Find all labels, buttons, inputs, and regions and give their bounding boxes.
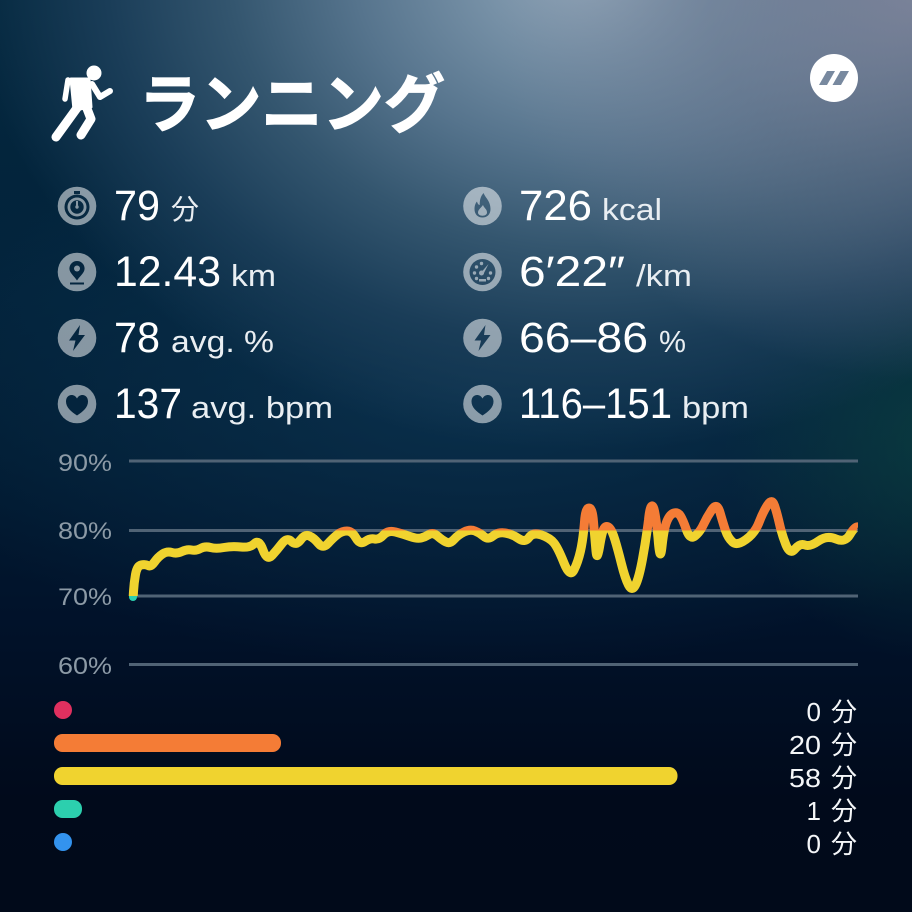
unit: km: km xyxy=(231,258,276,293)
label: yellow 58 min: 分 xyxy=(831,763,857,793)
stat: calories xyxy=(463,186,660,226)
value: 12.43 km: 12.43 xyxy=(114,248,221,296)
label: yellow 58 min: 58 xyxy=(789,763,821,793)
unit: bpm: bpm xyxy=(682,390,749,425)
unit: per km: /km xyxy=(636,258,692,293)
value: 726: 726 xyxy=(519,182,592,230)
bar: red zone xyxy=(54,701,72,719)
stat: effort range xyxy=(463,318,685,358)
unit: avg. bpm: avg. bpm xyxy=(191,390,333,425)
label: orange 20 min: 20 xyxy=(789,730,821,760)
effort line: orange zone xyxy=(336,497,858,530)
bar: teal zone xyxy=(54,800,82,818)
label: blue 0 min: 分 xyxy=(831,829,857,859)
bar: blue zone xyxy=(54,833,72,851)
label: red 0 min xyxy=(807,697,857,727)
icon: location pin xyxy=(58,253,96,291)
label: teal 1 min xyxy=(807,796,857,826)
value: 79 minutes: 79 xyxy=(114,182,160,230)
label: orange 20 min xyxy=(789,730,857,760)
unit: kcal: kcal xyxy=(602,192,662,227)
label: blue 0 min xyxy=(807,829,857,859)
y axis label 90%: 90% xyxy=(58,450,112,477)
icon: runner xyxy=(56,66,110,137)
effort line: yellow zone xyxy=(128,530,858,596)
value: pace: 6′22″ xyxy=(519,248,625,296)
zone duration labels xyxy=(789,697,857,859)
icon: bolt xyxy=(58,319,96,357)
label: orange 20 min: 分 xyxy=(831,730,857,760)
bar: orange zone xyxy=(54,734,281,752)
label: yellow 58 min xyxy=(789,763,857,793)
y axis label 60%: 60% xyxy=(58,653,112,680)
stat: pace xyxy=(463,252,690,292)
unit: avg. percent: avg. % xyxy=(171,324,274,359)
icon: gauge xyxy=(463,253,502,291)
value: 137: 137 xyxy=(114,380,182,428)
stat: heart rate range xyxy=(463,384,747,424)
label: red 0 min: 分 xyxy=(831,697,857,727)
icon: logo badge xyxy=(810,54,858,102)
unit: minutes: 分 xyxy=(171,194,199,225)
y axis label 80%: 80% xyxy=(58,518,112,545)
value: 78: 78 xyxy=(114,314,160,362)
label: teal 1 min: 1 xyxy=(807,796,821,826)
effort line: teal zone xyxy=(129,596,137,601)
stat: average effort xyxy=(58,318,273,358)
stat: duration xyxy=(58,186,198,226)
label: blue 0 min: 0 xyxy=(807,829,821,859)
label: red 0 min: 0 xyxy=(807,697,821,727)
value: 66-86: 66–86 xyxy=(519,314,648,362)
y axis label 70%: 70% xyxy=(58,584,112,611)
value: 116-151: 116–151 xyxy=(519,380,672,428)
bar: yellow zone xyxy=(54,767,678,785)
stat: average heart rate xyxy=(58,384,331,424)
icon: bolt xyxy=(463,319,502,357)
icon: stopwatch xyxy=(58,187,96,225)
unit: percent: % xyxy=(659,324,686,359)
stat: distance xyxy=(58,252,274,292)
icon: heart xyxy=(463,385,502,423)
zone bars xyxy=(54,701,678,851)
title: ランニング xyxy=(139,54,445,146)
label: teal 1 min: 分 xyxy=(831,796,857,826)
line chart: effort percent over time xyxy=(58,450,858,680)
icon: heart xyxy=(58,385,96,423)
icon: flame xyxy=(463,187,502,225)
